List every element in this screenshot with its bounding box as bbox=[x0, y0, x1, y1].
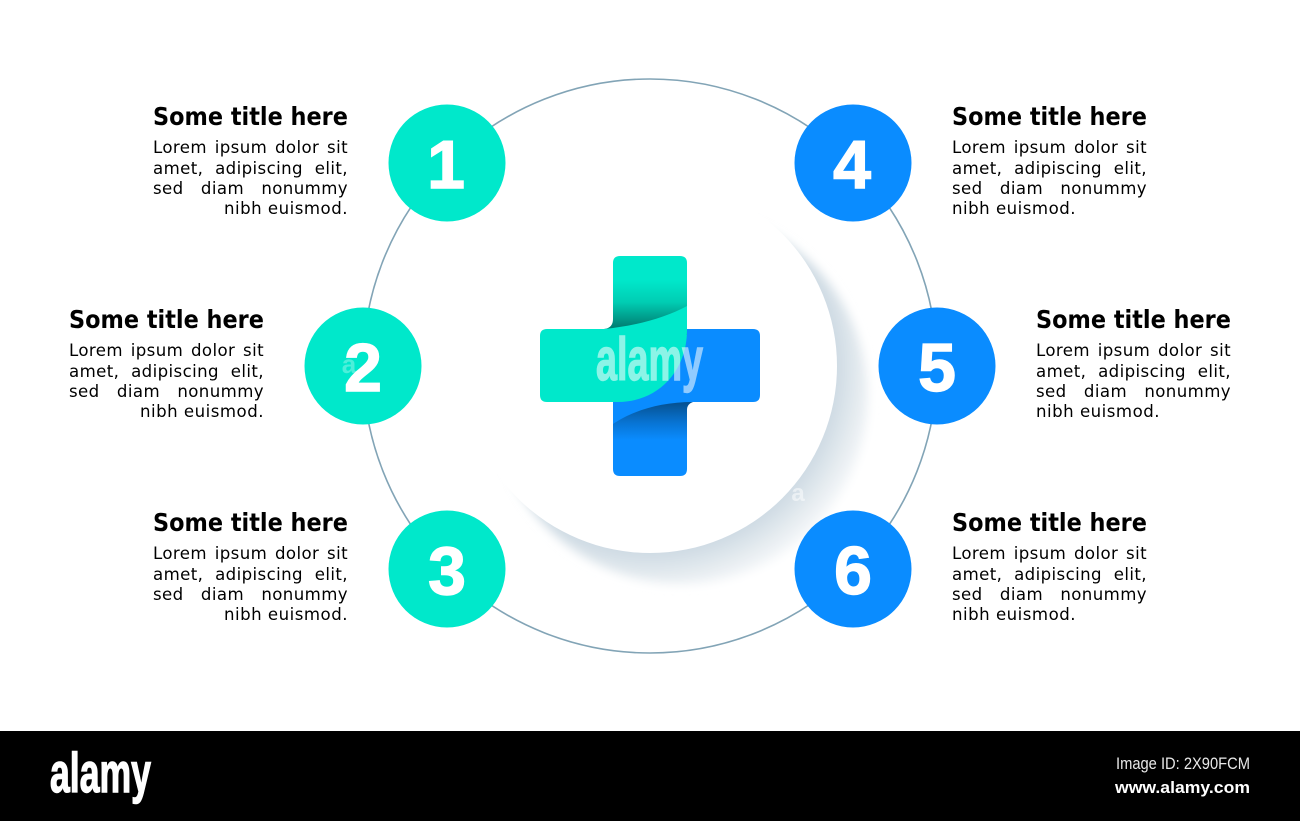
text block 3: Some title here bbox=[153, 508, 348, 538]
watermark: alamy: alamy bbox=[596, 326, 703, 393]
teal upper arm bbox=[604, 256, 687, 335]
text block 1 bbox=[153, 102, 348, 218]
badge 3: 3 bbox=[428, 533, 466, 609]
text block 6 bbox=[952, 508, 1147, 624]
text block 6: Lorem ipsum dolor sit bbox=[952, 544, 1147, 563]
text block 3 bbox=[153, 508, 348, 624]
blue lower arm bbox=[613, 400, 693, 476]
badge 2 bbox=[304, 308, 422, 424]
badge 5 bbox=[878, 308, 996, 424]
text block 4: Lorem ipsum dolor sit bbox=[952, 138, 1147, 157]
badge 2: a bbox=[342, 349, 357, 379]
badge 5: 5 bbox=[918, 330, 956, 406]
text block 4: nibh euismod. bbox=[952, 198, 1076, 218]
outer ring bbox=[363, 79, 937, 653]
text block 4: amet, adipiscing elit, bbox=[952, 158, 1147, 178]
text block 5: nibh euismod. bbox=[1036, 402, 1160, 420]
text block 6: Some title here bbox=[952, 508, 1147, 538]
text block 3: sed diam nonummy bbox=[153, 584, 348, 604]
text block 4 bbox=[952, 102, 1147, 218]
text block 1: nibh euismod. bbox=[224, 198, 348, 218]
badge 6 bbox=[794, 510, 912, 628]
text block 5: Lorem ipsum dolor sit bbox=[1036, 341, 1231, 360]
icon: medical cross bbox=[540, 256, 760, 476]
blue horizontal arm bbox=[613, 329, 760, 424]
image id: Image ID: 2X90FCM bbox=[1116, 754, 1250, 773]
website: www.alamy.com bbox=[1114, 778, 1250, 797]
text block 2 bbox=[69, 305, 264, 420]
badge 4: 4 bbox=[833, 127, 871, 203]
text block 1: amet, adipiscing elit, bbox=[153, 158, 348, 178]
text block 6: amet, adipiscing elit, bbox=[952, 564, 1147, 584]
text block 1: Some title here bbox=[153, 102, 348, 132]
text block 5 bbox=[1036, 305, 1231, 420]
text block 2: sed diam nonummy bbox=[69, 382, 264, 400]
badge 3 bbox=[388, 510, 506, 628]
badge 6: 6 bbox=[834, 533, 872, 609]
text block 6: nibh euismod. bbox=[952, 604, 1076, 624]
badge 4 bbox=[794, 104, 912, 222]
text block 4: sed diam nonummy bbox=[952, 178, 1147, 198]
text block 3: nibh euismod. bbox=[224, 604, 348, 624]
text block 2: Some title here bbox=[69, 305, 264, 335]
central disc with shadow: a bbox=[791, 480, 805, 507]
badge 2: 2 bbox=[344, 330, 382, 406]
footer bar bbox=[0, 731, 1300, 821]
text block 5: amet, adipiscing elit, bbox=[1036, 362, 1231, 380]
text block 5: Some title here bbox=[1036, 305, 1231, 335]
badge 1: 1 bbox=[427, 127, 465, 203]
teal horizontal arm with curled fold bbox=[540, 306, 687, 402]
text block 6: sed diam nonummy bbox=[952, 584, 1147, 604]
text block 1: sed diam nonummy bbox=[153, 178, 348, 198]
text block 3: Lorem ipsum dolor sit bbox=[153, 544, 348, 563]
text block 2: amet, adipiscing elit, bbox=[69, 362, 264, 380]
text block 5: sed diam nonummy bbox=[1036, 382, 1231, 400]
text block 1: Lorem ipsum dolor sit bbox=[153, 138, 348, 157]
central disc with shadow bbox=[463, 179, 868, 584]
text block 2: nibh euismod. bbox=[140, 402, 264, 420]
text block 4: Some title here bbox=[952, 102, 1147, 132]
text block 3: amet, adipiscing elit, bbox=[153, 564, 348, 584]
footer logo: alamy bbox=[50, 741, 151, 804]
badge 1 bbox=[388, 104, 506, 222]
text block 2: Lorem ipsum dolor sit bbox=[69, 341, 264, 360]
